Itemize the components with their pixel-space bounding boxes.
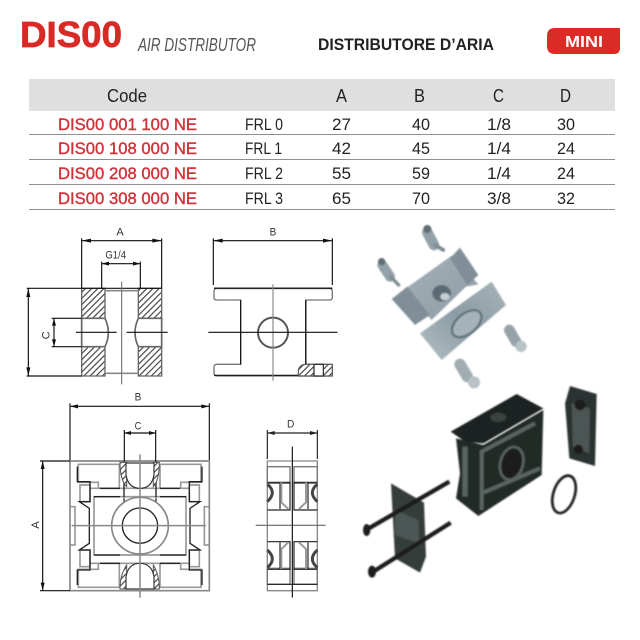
long screws: [366, 482, 451, 573]
subtitle: air distributor: AIR DISTRIBUTOR: [137, 35, 256, 55]
drawing: side view with dimension B: B: [270, 227, 276, 239]
badge: mini: [547, 28, 620, 54]
table row 2: FRL 1: [245, 139, 282, 158]
front plate: [420, 282, 506, 360]
table row 3: [29, 164, 615, 185]
table header: B: [414, 86, 425, 106]
table row 1: 1/8: [487, 115, 511, 134]
left end plate: [391, 483, 426, 573]
port on front plate: [447, 305, 486, 342]
table row 2: DIS00 108 000 NE: [58, 139, 197, 158]
table row 1: DIS00 001 100 NE: [58, 115, 197, 134]
drawing: front view with dimensions A, B, C: [30, 391, 209, 598]
drawing: section view with dimensions A, G1/4, C: C: [40, 331, 52, 339]
body top plate: [405, 256, 478, 320]
drawing: section view with dimensions A, G1/4, C: A: [116, 227, 124, 239]
drawing: end view with dimension D: [256, 418, 326, 598]
table row 1: FRL 0: [245, 115, 283, 134]
drawing: side view with dimension B: [208, 227, 337, 381]
drawing: section view with dimensions A, G1/4, C: [26, 227, 168, 384]
badge: mini: MINI: [565, 34, 603, 51]
table row 2: 1/4: [487, 139, 511, 158]
table row 4: DIS00 308 000 NE: [58, 189, 197, 208]
table row 3: DIS00 208 000 NE: [58, 164, 197, 183]
table row 1: 30: [557, 115, 575, 134]
table row 2: 45: [412, 139, 430, 158]
table row 2: 24: [557, 139, 575, 158]
table row 4: 70: [412, 189, 430, 208]
table row 4: 3/8: [487, 189, 511, 208]
table row 3: 1/4: [487, 164, 511, 183]
table row 1: [29, 115, 615, 135]
drawing: end view with dimension D: D: [287, 418, 294, 430]
drawing: front view with dimensions A, B, C: B: [135, 391, 141, 403]
right end plate: [565, 386, 597, 466]
table header: Code: [107, 86, 147, 106]
grey ribs on body: [482, 423, 540, 510]
table header: A: [336, 86, 347, 106]
table row 3: 24: [557, 164, 575, 183]
table row 3: 59: [412, 164, 430, 183]
table row 4: [29, 189, 615, 210]
top of black body: [451, 394, 543, 443]
table row 3: 55: [332, 164, 351, 183]
drawing: front view with dimensions A, B, C: C: [135, 421, 141, 433]
table header: C: [493, 86, 504, 106]
body dark blocks: [392, 248, 478, 325]
drawing: front view with dimensions A, B, C: A: [30, 521, 42, 529]
table row 4: 65: [332, 189, 351, 208]
subtitle: distributore d'aria: DISTRIBUTORE D’ARIA: [318, 35, 494, 54]
drawing: section view with dimensions A, G1/4, C: G1/4: [105, 250, 126, 262]
table row 4: 32: [557, 189, 575, 208]
table header: D: [560, 86, 571, 106]
o-ring: [548, 473, 580, 516]
table row 2: [29, 139, 615, 160]
top hole: [432, 285, 451, 302]
table row 4: FRL 3: [245, 189, 283, 208]
specification table: [29, 79, 615, 210]
photo: black distributor exploded view: [363, 386, 597, 578]
table row 3: FRL 2: [245, 164, 283, 183]
table row 1: 27: [332, 115, 351, 134]
photo: grey distributor with screws: [378, 225, 527, 388]
table header: [29, 79, 615, 111]
front of black body: [456, 410, 543, 516]
table row 2: 42: [332, 139, 351, 158]
title: DIS00: [20, 14, 122, 55]
screws: [382, 232, 516, 377]
table row 1: 40: [412, 115, 430, 134]
